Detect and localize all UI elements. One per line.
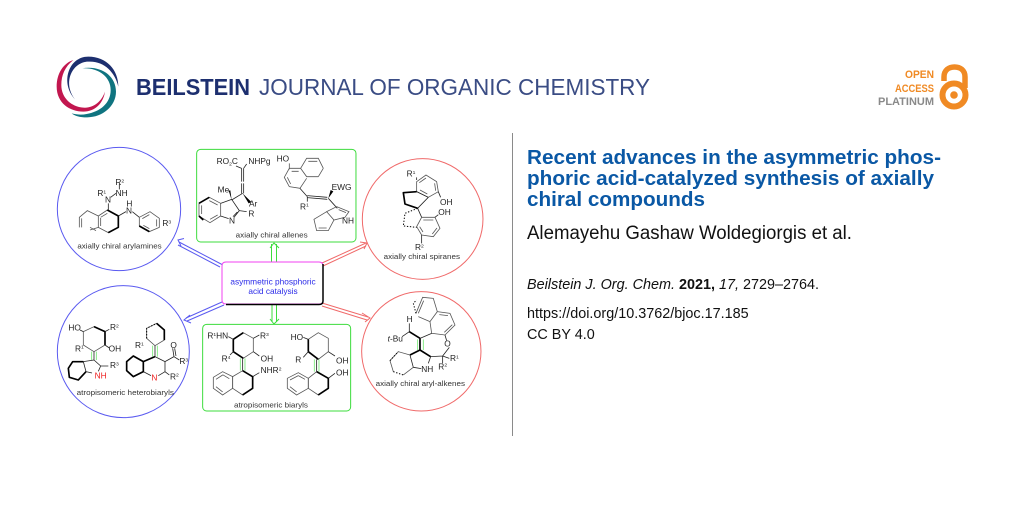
heterobiaryl structure 1: 2 (116, 323, 119, 329)
spirane structure: 1 (413, 170, 416, 176)
allene structure 2: NH (342, 215, 354, 225)
biaryl structure 1 (207, 331, 282, 395)
arrow: to arylamines (178, 238, 222, 267)
biaryl structure 1: R (207, 331, 213, 341)
centre box: asymmetric phosphoric acid catalysis: acid catalysis (248, 286, 298, 296)
journal name: JOURNAL OF ORGANIC CHEMISTRY (259, 74, 650, 100)
arrow: to heterobiaryls (184, 302, 224, 323)
arylamine structure: N (126, 205, 132, 215)
heterobiaryl structure 2: O (170, 340, 177, 350)
authors: Alemayehu Gashaw Woldegiorgis et al. (527, 223, 852, 244)
heterobiaryl structure 2: R (135, 340, 141, 350)
biaryl structure 2 (287, 332, 348, 395)
centre box: asymmetric phosphoric acid catalysis (222, 262, 323, 304)
arylamine structure: 1 (103, 189, 106, 195)
open access platinum badge: OPEN (905, 69, 934, 81)
allene structure 2: EWG (332, 182, 352, 192)
biaryl structure 1: 4 (228, 355, 231, 361)
aryl-alkene structure: R (450, 353, 456, 363)
biaryl structure 2: R (295, 355, 301, 365)
journal name: BEILSTEIN (136, 74, 250, 100)
spirane structure (403, 169, 452, 252)
article title: chiral compounds (527, 189, 705, 211)
heterobiaryl structure 1 (68, 322, 121, 381)
allene structure 1 (199, 156, 271, 225)
arylamine structure: R (97, 188, 103, 198)
heterobiaryl structure 2: 3 (185, 357, 188, 363)
arrow: to biaryls (270, 305, 279, 324)
aryl-alkene structure: NH (421, 364, 433, 374)
heterobiaryl structure 1: R (75, 343, 81, 353)
allene structure 1: N (229, 215, 235, 225)
open access platinum badge: PLATINUM (878, 96, 934, 108)
heterobiaryl structure 2 (127, 323, 188, 382)
allene structure 2: R (300, 201, 306, 211)
aryl-alkene structure: t-Bu (388, 333, 403, 343)
heterobiaryl structure 2: 1 (141, 341, 144, 347)
heterobiaryl structure 1: 3 (116, 361, 119, 367)
heterobiaryl structure 1: 1 (81, 345, 84, 351)
spirane structure: OH (438, 207, 451, 217)
panel: atropisomeric heterobiaryls (57, 286, 189, 418)
aryl-alkene structure: O (444, 339, 451, 349)
centre box: asymmetric phosphoric acid catalysis: asymmetric phosphoric (230, 276, 316, 286)
arylamine structure: N (105, 195, 111, 205)
citation: Beilstein J. Org. Chem. 2021, 17, 2729–2764. (527, 277, 819, 293)
biaryl structure 1: 1 (213, 332, 216, 338)
arylamine structure: H (126, 199, 132, 209)
panel: axially chiral arylamines (57, 147, 181, 271)
panel: axially chiral spiranes: axially chiral spiranes (384, 252, 460, 261)
arylamine structure: NH (116, 188, 128, 198)
heterobiaryl structure 1: OH (109, 343, 121, 353)
panel: atropisomeric biaryls (203, 324, 351, 411)
panel: atropisomeric heterobiaryls: atropisomeric heterobiaryls (77, 388, 174, 397)
heterobiaryl structure 2: R (170, 371, 176, 381)
divider (512, 133, 514, 436)
panel: axially chiral arylamines: axially chiral arylamines (77, 242, 162, 251)
article title: Recent advances in the asymmetric phos- (527, 147, 941, 169)
arrow: to spiranes (322, 242, 367, 266)
arylamine structure: R (162, 218, 168, 228)
licence: CC BY 4.0 (527, 327, 595, 343)
panel: axially chiral aryl-alkenes: axially chiral aryl-alkenes (376, 379, 465, 388)
aryl-alkene structure: 1 (456, 354, 459, 360)
heterobiaryl structure 1: HO (68, 323, 81, 333)
heterobiaryl structure 2: 2 (176, 373, 179, 379)
biaryl structure 1: HN (216, 331, 228, 341)
aryl-alkene structure: R (438, 361, 444, 371)
arylamine structure: 2 (121, 178, 124, 184)
allene structure 1: 2 (229, 162, 232, 168)
panel: axially chiral aryl-alkenes (362, 292, 481, 411)
article title: phoric acid-catalyzed synthesis of axially (527, 168, 935, 190)
aryl-alkene structure (388, 297, 459, 375)
allene structure 1: Ar (249, 199, 258, 209)
logo: Beilstein swirl (57, 57, 118, 117)
spirane structure: 2 (421, 243, 424, 249)
heterobiaryl structure 1: R (110, 360, 116, 370)
panel: axially chiral allenes: axially chiral allenes (236, 231, 308, 240)
article title (527, 147, 941, 211)
arylamine structure: 3 (168, 219, 171, 225)
panel: axially chiral allenes (197, 149, 356, 242)
allene structure 1: C (232, 156, 238, 166)
aryl-alkene structure: H (407, 314, 413, 324)
biaryl structure 1: OH (261, 354, 273, 364)
arylamine structure: R (115, 177, 121, 187)
heterobiaryl structure 2: R (179, 356, 185, 366)
biaryl structure 1: R (222, 354, 228, 364)
allene structure 1: RO (217, 156, 229, 166)
heterobiaryl structure 1: R (110, 322, 116, 332)
allene structure 1: Me (218, 185, 230, 195)
aryl-alkene structure: 2 (444, 363, 447, 369)
arylamine structure (79, 177, 171, 233)
heterobiaryl structure 2: N (151, 372, 157, 382)
biaryl structure 1: 2 (279, 366, 282, 372)
allene structure 1: NHPg (248, 156, 271, 166)
biaryl structure 2: OH (336, 355, 348, 365)
spirane structure: OH (440, 197, 452, 207)
spirane structure: R (415, 242, 421, 252)
biaryl structure 1: R (260, 331, 266, 341)
heterobiaryl structure 1: NH (95, 371, 107, 381)
open access platinum badge (878, 67, 966, 108)
biaryl structure 2: HO (291, 332, 304, 342)
panel: axially chiral spiranes (362, 159, 483, 279)
allene structure 2 (277, 153, 354, 231)
allene structure 1: R (248, 209, 254, 219)
allene structure 2: HO (277, 153, 290, 163)
biaryl structure 1: NHR (261, 365, 279, 375)
biaryl structure 1: 3 (266, 332, 269, 338)
biaryl structure 2: OH (336, 368, 348, 378)
spirane structure: R (407, 169, 413, 179)
open access platinum badge: ACCESS (895, 83, 934, 95)
arrow: to aryl-alkenes (322, 303, 370, 322)
arrow: to allenes (270, 243, 279, 262)
panel: atropisomeric biaryls: atropisomeric biaryls (234, 401, 308, 410)
allene structure 2: 1 (306, 203, 309, 209)
doi: https://doi.org/10.3762/bjoc.17.185 (527, 306, 749, 322)
